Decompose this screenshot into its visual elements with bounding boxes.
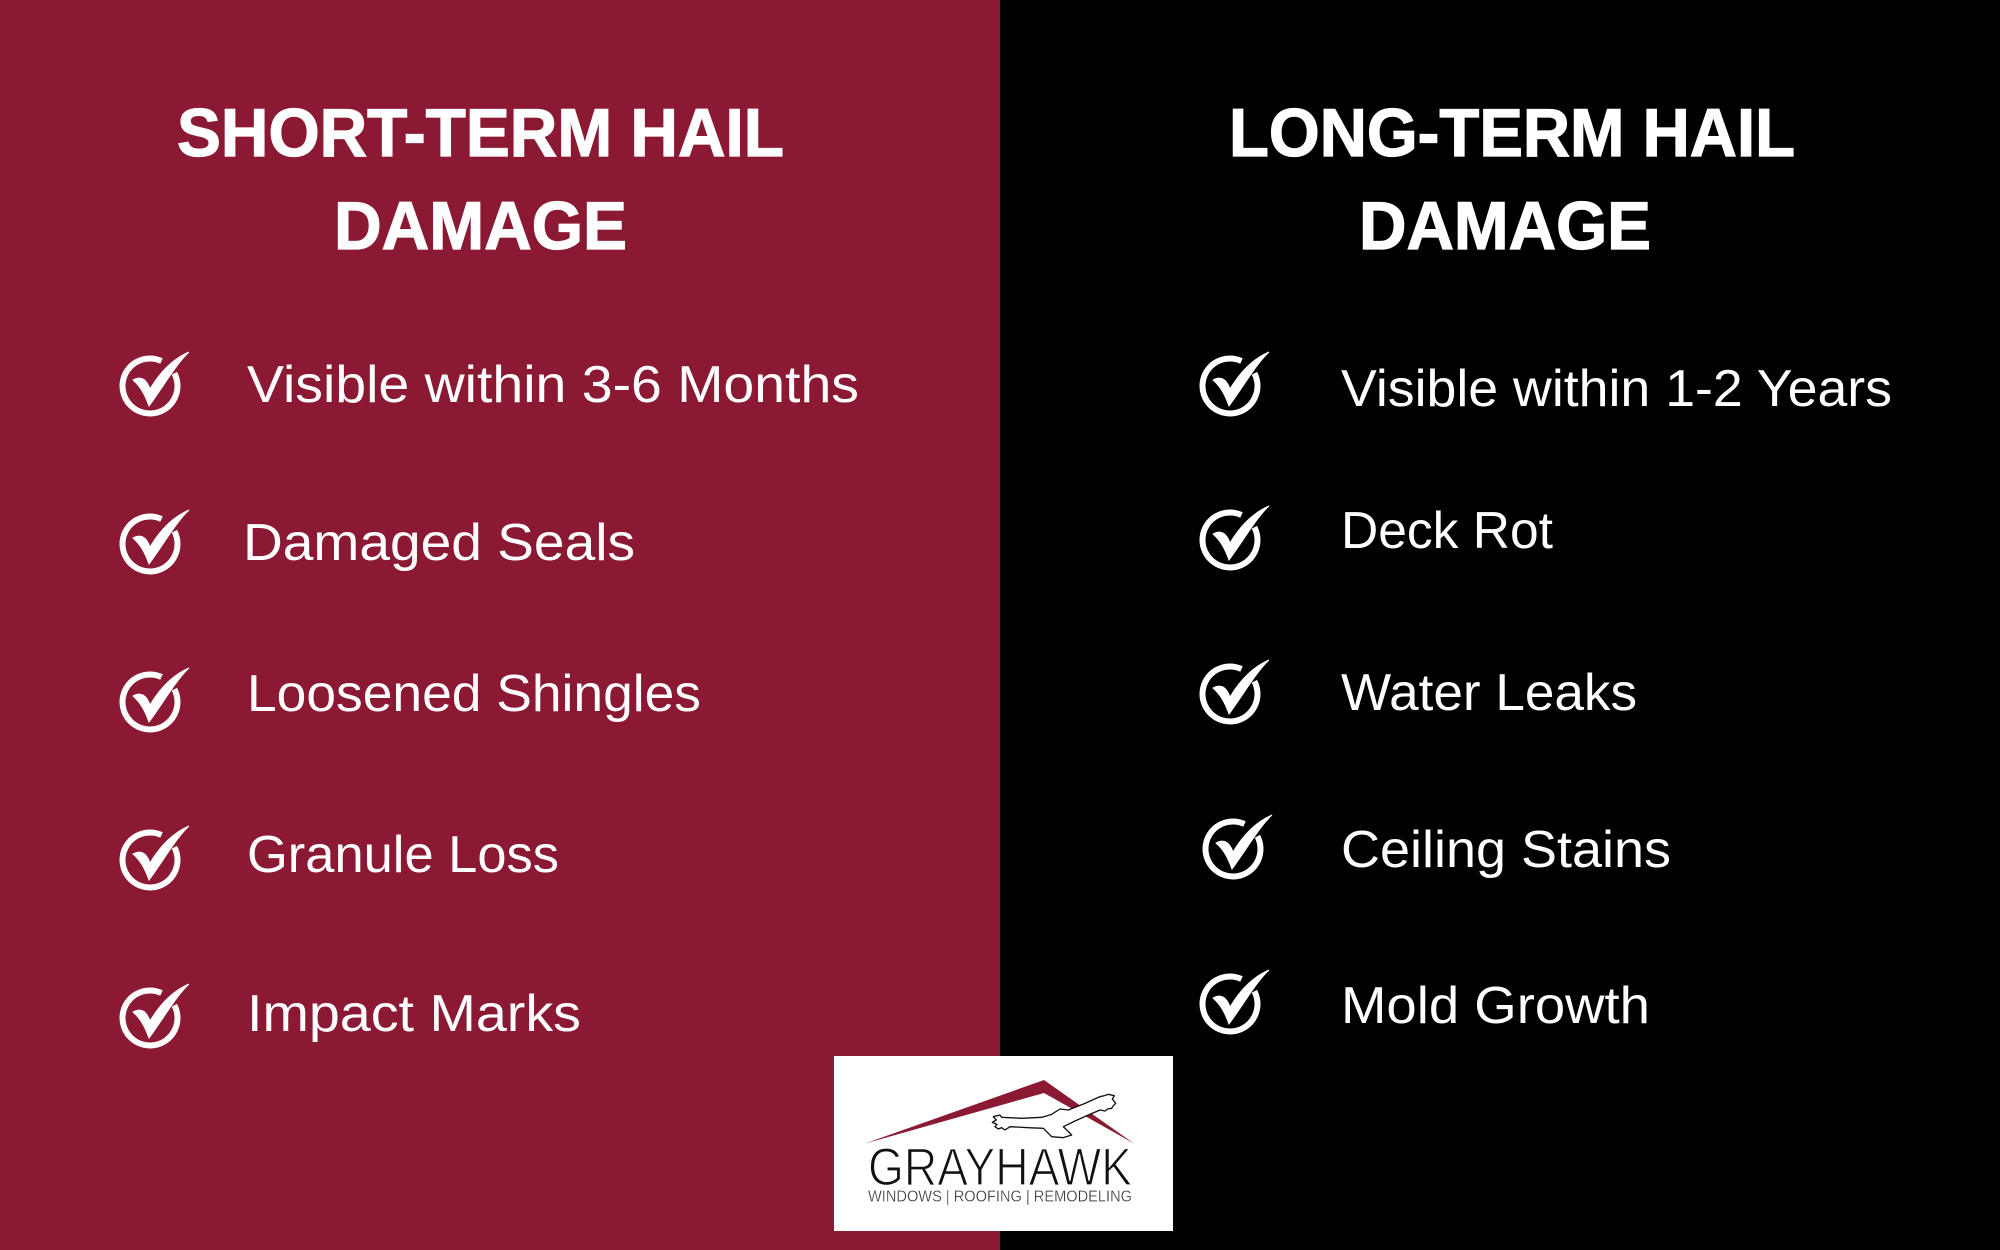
item: impact marks: Impact Marks [247,985,581,1043]
list: long-term items [1202,352,1892,1035]
item: visible within 3-6 months: Visible within 3-6 Months [247,356,859,414]
panel: long-term background [1000,0,2000,1250]
icon: hawk [992,1094,1116,1138]
logo wordmark: GRAYHAWK [868,1138,1132,1197]
item: mold growth [1202,970,1650,1035]
item: water leaks [1202,660,1637,722]
item: damaged seals: Damaged Seals [243,514,635,572]
icon: roof [865,1080,1134,1144]
heading: long-term hail damage: LONG-TERM HAIL [1229,95,1795,171]
heading: short-term hail damage: DAMAGE [334,188,627,264]
item: damaged seals [122,510,635,572]
logo: Grayhawk [834,1056,1173,1231]
heading: short-term hail damage [177,95,784,264]
item: ceiling stains: Ceiling Stains [1341,821,1671,879]
item: loosened shingles: Loosened Shingles [247,665,701,723]
item: loosened shingles [122,665,701,729]
heading: short-term hail damage: SHORT-TERM HAIL [177,95,784,171]
heading: long-term hail damage [1229,95,1795,264]
logo tagline: WINDOWS | ROOFING | REMODELING [868,1188,1132,1206]
item: visible within 1-2 years: Visible within 1-2 Years [1341,360,1892,418]
panel: short-term background [0,0,1000,1250]
list: short-term items [122,352,859,1045]
item: mold growth: Mold Growth [1341,977,1650,1035]
heading: long-term hail damage: DAMAGE [1359,188,1651,264]
item: granule loss: Granule Loss [247,826,559,884]
item: ceiling stains [1205,815,1671,879]
item: granule loss [122,826,559,887]
item: deck rot: Deck Rot [1341,502,1554,560]
item: visible within 1-2 years [1202,352,1892,418]
item: impact marks [122,984,581,1045]
item: deck rot [1202,502,1554,567]
item: water leaks: Water Leaks [1341,664,1637,722]
